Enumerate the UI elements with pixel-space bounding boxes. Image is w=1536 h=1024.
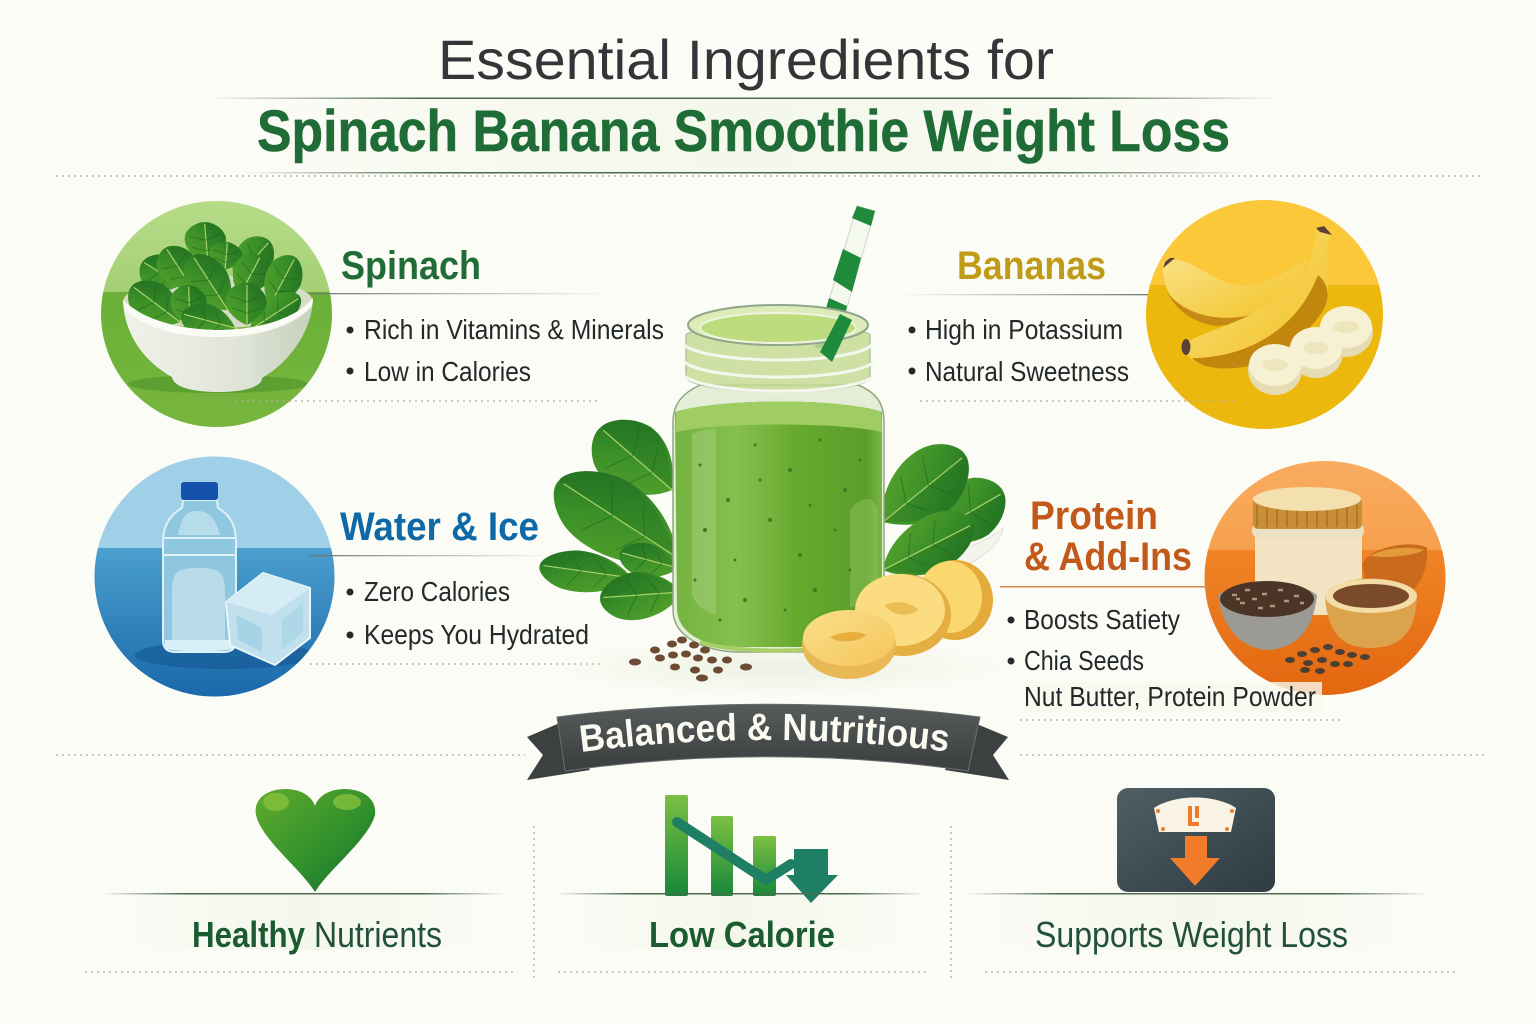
jar neck and rim [686, 328, 870, 392]
heading: protein and add-ins: & Add-Ins [1024, 535, 1192, 579]
label: healthy nutrients: Healthy [192, 914, 305, 955]
icon: spinach bowl circle [100, 198, 335, 432]
title line two: Spinach Banana Smoothie Weight Loss [257, 99, 1230, 164]
icon: weighing scale [1117, 788, 1275, 892]
list: water benefits: Keeps You Hydrated [364, 619, 589, 650]
banner: balanced and nutritious [527, 704, 1009, 780]
jar body [673, 385, 884, 652]
banana slices [1248, 306, 1373, 395]
smoothie flecks [694, 438, 862, 622]
banner: balanced and nutritious: Balanced & Nutritious [580, 712, 948, 752]
label: low calorie: Low Calorie [649, 914, 835, 955]
panel: protein and add-ins [1000, 455, 1450, 720]
label: healthy nutrients: Nutrients [314, 914, 442, 955]
icon: water bottle and ice circle [90, 455, 340, 698]
heading: protein and add-ins [1024, 494, 1192, 579]
list: banana benefits: Natural Sweetness [925, 356, 1129, 387]
panel: healthy nutrients [85, 789, 515, 972]
list: protein benefits: Chia Seeds [1024, 645, 1144, 676]
list: water benefits [346, 576, 589, 650]
centre illustration: smoothie jar [537, 206, 1020, 698]
panel: supports weight loss [965, 788, 1455, 972]
list: protein benefits: Boosts Satiety [1024, 604, 1180, 635]
title block [205, 28, 1280, 174]
icon: protein jar and seeds circle [1200, 455, 1450, 700]
panel: water and ice [90, 455, 600, 698]
scattered seeds [629, 636, 752, 682]
list: water benefits: Zero Calories [364, 576, 510, 607]
panel: spinach [100, 198, 664, 432]
straw [815, 206, 875, 352]
icon: falling bar chart [665, 795, 838, 903]
smoothie [675, 402, 882, 647]
heading: protein and add-ins: Protein [1030, 494, 1158, 538]
list: spinach benefits: Rich in Vitamins & Minerals [364, 314, 664, 345]
list: spinach benefits [346, 314, 664, 387]
label: healthy nutrients [192, 914, 442, 955]
list: spinach benefits: Low in Calories [364, 356, 531, 387]
label: supports weight loss: Supports Weight Loss [1035, 914, 1348, 955]
list: protein benefits [1008, 604, 1322, 712]
seed pile [1285, 644, 1370, 674]
panel: bananas [898, 195, 1390, 435]
spinach leaves left [537, 402, 705, 622]
icon: heart [256, 789, 375, 892]
panel: low calorie [555, 795, 930, 972]
title line one: Essential Ingredients for [438, 28, 1054, 91]
list: protein benefits: Nut Butter, Protein Powder [1024, 681, 1316, 712]
heading: bananas: Bananas [957, 244, 1106, 288]
banana slices [802, 560, 993, 679]
spinach leaves right with white bowl [856, 428, 1018, 596]
heading: spinach: Spinach [341, 244, 481, 288]
list: banana benefits: High in Potassium [925, 314, 1123, 345]
heading: water and ice: Water & Ice [340, 505, 539, 549]
list: banana benefits [908, 314, 1129, 387]
icon: bananas circle [1140, 195, 1390, 435]
